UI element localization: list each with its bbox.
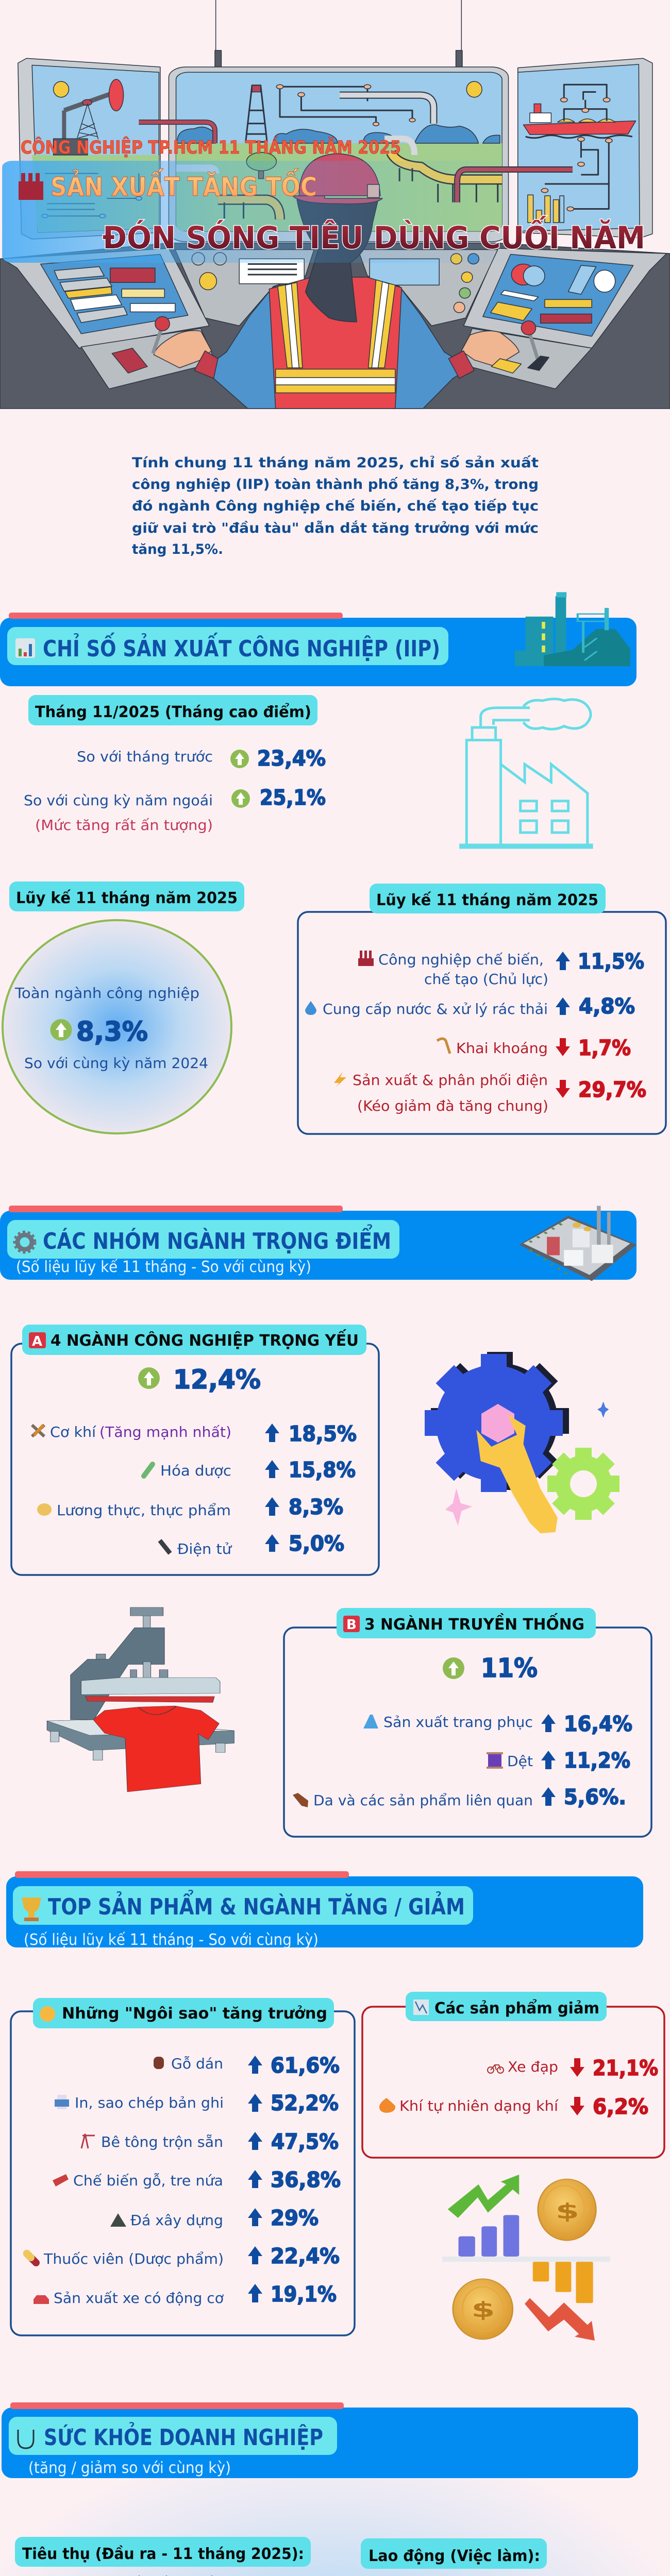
- icon: factory: [19, 173, 43, 200]
- row: in sao chép: [55, 2091, 339, 2115]
- panel B: 3 ngành truyền thống: B: [346, 1617, 357, 1633]
- row: lương thực: [37, 1495, 343, 1519]
- row: cơ khí: (Tăng mạnh nhất): [99, 1423, 231, 1440]
- section header: sức khỏe doanh nghiệp: (tăng / giảm so với cùng kỳ): [28, 2459, 231, 2477]
- panel: lũy kế circle: [3, 882, 244, 1133]
- section header: top sản phẩm: TOP SẢN PHẨM & NGÀNH TĂNG / GIẢM: [48, 1889, 465, 1920]
- row: điện: 29,7%: [578, 1077, 646, 1102]
- icon: teal factory: [515, 592, 630, 666]
- row: xe đạp: Xe đạp: [508, 2058, 558, 2075]
- icon: trophy: [22, 1897, 41, 1921]
- panel B: 3 ngành truyền thống: 11%: [481, 1653, 538, 1684]
- row: cơ khí: Cơ khí: [50, 1423, 96, 1440]
- icon: gear: [14, 1232, 35, 1252]
- panel B: 3 ngành truyền thống: [284, 1608, 651, 1837]
- row: xe đạp: 21,1%: [593, 2056, 658, 2080]
- row: bê tông: [81, 2129, 339, 2154]
- panel: tiêu thụ: Tiêu thụ (Đầu ra - 11 tháng 2025):: [22, 2545, 304, 2563]
- panel: những ngôi sao tăng trưởng: [11, 1998, 355, 2335]
- row: điện tử: [160, 1531, 344, 1557]
- row: khai khoáng: 1,7%: [578, 1036, 631, 1060]
- section header: sức khỏe doanh nghiệp: SỨC KHỎE DOANH NGHIỆP: [44, 2421, 323, 2451]
- row: da: [293, 1785, 626, 1809]
- stat row: so với tháng trước: 23,4%: [257, 746, 326, 771]
- section header: top sản phẩm: [6, 1871, 643, 1949]
- intro paragraph: tăng 11,5%.: [132, 541, 223, 557]
- row: chế biến: Công nghiệp chế biến,: [378, 951, 544, 968]
- icon: factory outline: [459, 699, 593, 846]
- panel: lũy kế by sector: [298, 884, 666, 1134]
- row: khí tự nhiên: Khí tự nhiên dạng khí: [399, 2097, 559, 2114]
- background glow: business health: [0, 2434, 670, 2576]
- row: trang phục: 16,4%: [564, 1711, 632, 1736]
- stat row: so với cùng kỳ: (Mức tăng rất ấn tượng): [35, 817, 213, 834]
- panel: lũy kế circle: So với cùng kỳ năm 2024: [24, 1055, 208, 1072]
- panel A: 4 ngành công nghiệp: 4 NGÀNH CÔNG NGHIỆP TRỌNG YẾU: [51, 1329, 359, 1350]
- row: lương thực: 8,3%: [289, 1495, 343, 1519]
- panel: lũy kế circle: Toàn ngành công nghiệp: [14, 985, 199, 1002]
- row: chế biến gỗ: 36,8%: [271, 2167, 341, 2192]
- row: in sao chép: In, sao chép bản ghi: [75, 2094, 224, 2111]
- icon: finance rise and fall illustration: $: [556, 2199, 579, 2224]
- stat row: so với cùng kỳ: [24, 785, 326, 834]
- panel: lao động: [347, 2538, 661, 2576]
- row: bê tông: 47,5%: [271, 2129, 339, 2154]
- row: khí tự nhiên: 6,2%: [593, 2094, 648, 2119]
- subheading: Tháng 11/2025: [28, 695, 317, 725]
- section header: nhóm ngành: (Số liệu lũy kế 11 tháng - So với cùng kỳ): [16, 1258, 311, 1276]
- icon: finance rise and fall illustration: [442, 2175, 610, 2341]
- panel A: 4 ngành công nghiệp: 12,4%: [173, 1365, 261, 1395]
- row: trang phục: Sản xuất trang phục: [383, 1714, 533, 1731]
- intro paragraph: [132, 455, 539, 557]
- icon: finance rise and fall illustration: $: [471, 2297, 495, 2322]
- intro paragraph: Tính chung 11 tháng năm 2025, chỉ số sản xuất: [132, 455, 539, 471]
- row: đá xây dựng: Đá xây dựng: [130, 2212, 223, 2229]
- row: hóa dược: 15,8%: [289, 1458, 356, 1482]
- row: chế biến gỗ: Chế biến gỗ, tre nứa: [73, 2172, 223, 2189]
- row: bê tông: Bê tông trộn sẵn: [101, 2133, 223, 2150]
- section title: CHỈ SỐ SẢN XUẤT CÔNG NGHIỆP (IIP): [43, 632, 440, 662]
- row: xe có động cơ: Sản xuất xe có động cơ: [54, 2290, 224, 2307]
- row: thuốc viên: Thuốc viên (Dược phẩm): [43, 2250, 224, 2267]
- hero illustration: control room operator: [0, 0, 670, 409]
- row: gỗ dán: Gỗ dán: [171, 2055, 223, 2072]
- stat row: so với cùng kỳ: So với cùng kỳ năm ngoái: [24, 792, 213, 809]
- row: chế biến gỗ: [53, 2167, 341, 2192]
- row: điện tử: 5,0%: [289, 1531, 344, 1556]
- row: chế biến: [358, 949, 644, 988]
- row: xe có động cơ: [34, 2282, 337, 2307]
- row: gỗ dán: [154, 2053, 340, 2078]
- row: thuốc viên: [27, 2244, 340, 2268]
- panel B: 3 ngành truyền thống: 3 NGÀNH TRUYỀN THỐNG: [364, 1613, 584, 1634]
- row: điện: Sản xuất & phân phối điện: [353, 1072, 548, 1089]
- row: nước: [305, 994, 635, 1019]
- row: khai khoáng: Khai khoáng: [456, 1040, 548, 1057]
- icon: stethoscope: [18, 2430, 34, 2448]
- section header: sức khỏe doanh nghiệp: [2, 2402, 638, 2478]
- intro paragraph: đó ngành Công nghiệp chế biến, chế tạo tiếp tục: [132, 498, 539, 514]
- panel: lũy kế circle: Lũy kế 11 tháng năm 2025: [16, 889, 238, 907]
- row: dệt: Dệt: [507, 1753, 533, 1770]
- row: cơ khí: 18,5%: [289, 1421, 357, 1446]
- stat row: so với tháng trước: [77, 746, 326, 771]
- row: điện: (Kéo giảm đà tăng chung): [357, 1097, 548, 1114]
- stat row: so với tháng trước: So với tháng trước: [77, 748, 213, 765]
- section header: top sản phẩm: (Số liệu lũy kế 11 tháng - So với cùng kỳ): [24, 1931, 319, 1949]
- row: cơ khí: [32, 1421, 357, 1446]
- row: gỗ dán: 61,6%: [271, 2053, 340, 2078]
- row: chế biến: chế tạo (Chủ lực): [424, 971, 548, 988]
- hero title line 2: ĐÓN SÓNG TIÊU DÙNG CUỐI NĂM: [103, 215, 645, 256]
- panel A: 4 ngành công nghiệp: A: [32, 1334, 42, 1349]
- panel A: 4 ngành công nghiệp: [11, 1325, 379, 1575]
- row: thuốc viên: 22,4%: [271, 2244, 340, 2268]
- icon: heat press and red t-shirt: [47, 1607, 234, 1792]
- row: xe đạp: [488, 2056, 658, 2080]
- row: da: Da và các sản phẩm liên quan: [313, 1792, 533, 1809]
- row: đá xây dựng: 29%: [271, 2206, 319, 2230]
- icon: isometric city: [519, 1206, 636, 1281]
- panel: lũy kế circle: 8,3%: [76, 1016, 148, 1047]
- row: hóa dược: Hóa dược: [160, 1462, 231, 1479]
- hero title block: [19, 136, 645, 256]
- panel: tiêu thụ: [15, 2537, 311, 2576]
- intro paragraph: công nghiệp (IIP) toàn thành phố tăng 8,3%, trong: [132, 477, 539, 493]
- icon: gear and wrench illustration: [425, 1352, 619, 1533]
- panel: lũy kế by sector: Lũy kế 11 tháng năm 2025: [376, 891, 598, 909]
- hero title line 1: SẢN XUẤT TĂNG TỐC: [51, 168, 317, 202]
- hero kicker: CÔNG NGHIỆP TP.HCM 11 THÁNG NĂM 2025: [21, 136, 401, 158]
- row: đá xây dựng: [110, 2206, 319, 2230]
- intro paragraph: giữ vai trò "đầu tàu" dẫn dắt tăng trưởng với mức: [132, 520, 539, 536]
- row: điện: [334, 1072, 646, 1114]
- row: xe có động cơ: 19,1%: [271, 2282, 337, 2307]
- row: dệt: [487, 1748, 630, 1773]
- row: khí tự nhiên: [379, 2094, 648, 2119]
- row: nước: Cung cấp nước & xử lý rác thải: [323, 1001, 548, 1018]
- panel: các sản phẩm giảm: Các sản phẩm giảm: [434, 1999, 599, 2018]
- subheading: Tháng 11/2025: Tháng 11/2025 (Tháng cao điểm): [35, 703, 311, 721]
- row: trang phục: [363, 1711, 632, 1736]
- row: lương thực: Lương thực, thực phẩm: [57, 1502, 231, 1519]
- row: in sao chép: 52,2%: [271, 2091, 339, 2115]
- row: hóa dược: [144, 1458, 356, 1482]
- section header: nhóm ngành: [0, 1206, 636, 1281]
- row: nước: 4,8%: [579, 994, 635, 1019]
- panel: lao động: Lao động (Việc làm):: [368, 2547, 540, 2565]
- icon: bar chart: [15, 638, 35, 658]
- row: dệt: 11,2%: [564, 1748, 630, 1773]
- row: khai khoáng: [437, 1036, 631, 1060]
- section header: IIP: [0, 592, 636, 686]
- stat row: so với cùng kỳ: 25,1%: [260, 785, 326, 810]
- row: chế biến: 11,5%: [578, 949, 644, 974]
- row: da: 5,6%.: [564, 1785, 626, 1809]
- panel: các sản phẩm giảm: [362, 1992, 664, 2158]
- section header: nhóm ngành: CÁC NHÓM NGÀNH TRỌNG ĐIỂM: [43, 1224, 391, 1255]
- panel: những ngôi sao tăng trưởng: Những "Ngôi sao" tăng trưởng: [62, 2005, 327, 2023]
- row: điện tử: Điện tử: [177, 1540, 232, 1557]
